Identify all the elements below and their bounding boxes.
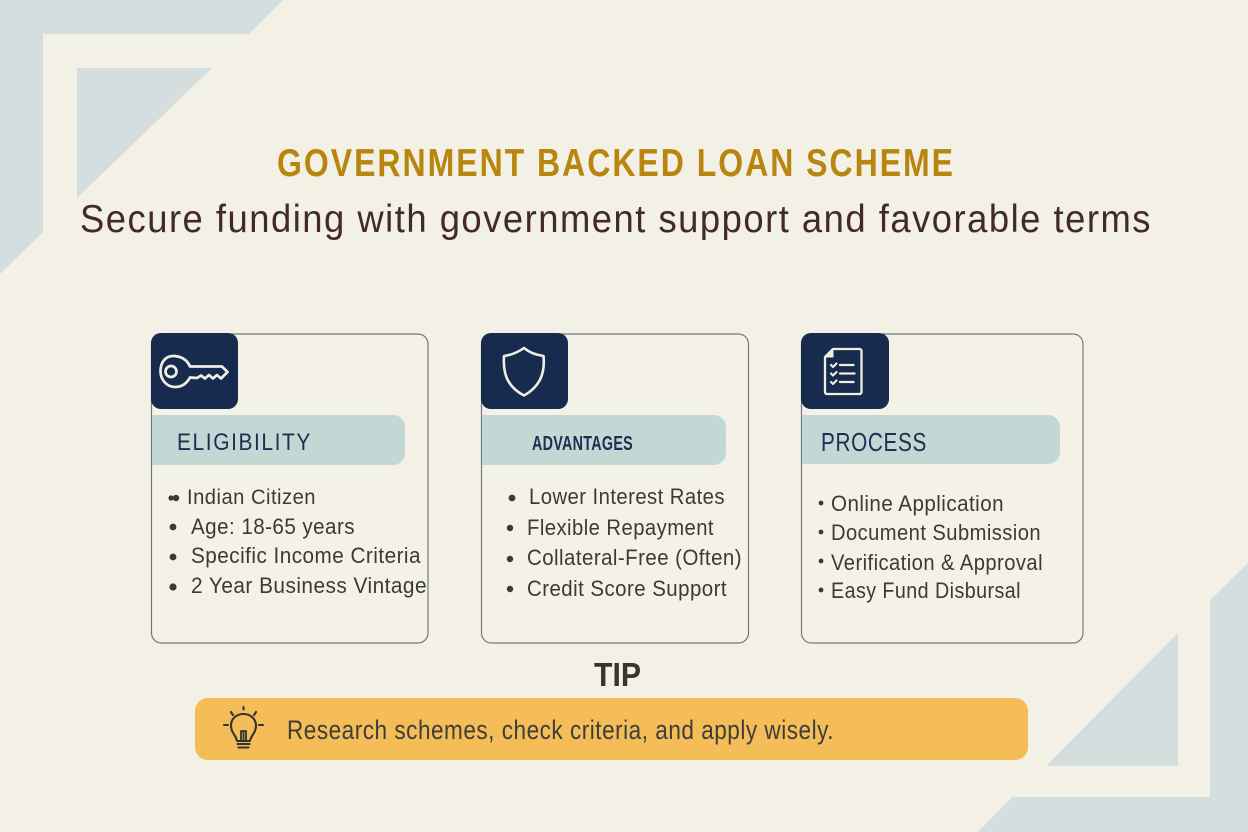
list: process items: Online Application <box>831 491 1004 516</box>
icon: light bulb <box>224 707 263 748</box>
card outline <box>152 334 428 643</box>
heading: tip: TIP <box>594 656 641 693</box>
list: advantages items: Flexible Repayment <box>527 515 714 540</box>
list: process items: Verification & Approval <box>831 550 1043 575</box>
list: advantages items: Collateral-Free (Often) <box>527 545 742 570</box>
heading: advantages: ADVANTAGES <box>532 433 633 455</box>
list: process items: Easy Fund Disbursal <box>831 578 1021 603</box>
list: advantages items: Lower Interest Rates <box>529 484 725 509</box>
list: advantages items: Credit Score Support <box>527 576 727 601</box>
list: process items <box>819 491 1043 603</box>
icon: checklist document <box>801 333 889 409</box>
tip text: Research schemes, check criteria, and apply wisely. <box>287 715 834 745</box>
list: eligibility items: Indian Citizen <box>187 485 316 509</box>
panel: process <box>801 333 1083 643</box>
heading: process: PROCESS <box>821 427 927 457</box>
list: eligibility items: Age: 18-65 years <box>191 514 355 539</box>
panel: eligibility <box>151 333 428 643</box>
list: process items: Document Submission <box>831 520 1041 545</box>
heading band <box>482 415 726 465</box>
icon: key <box>151 333 238 409</box>
list: eligibility items: Specific Income Criteria <box>191 543 421 568</box>
panel: advantages <box>481 333 748 643</box>
icon: shield <box>481 333 568 409</box>
list: eligibility items: 2 Year Business Vintage <box>191 573 427 598</box>
card outline <box>802 334 1083 643</box>
list: advantages items <box>507 484 742 601</box>
heading band <box>152 415 405 465</box>
decoration: bottom-right corner shapes <box>978 563 1248 832</box>
decoration: top-left corner shapes <box>0 0 283 274</box>
heading band <box>802 415 1060 464</box>
list: eligibility items <box>168 485 427 598</box>
title: GOVERNMENT BACKED LOAN SCHEME <box>277 142 955 185</box>
card outline <box>482 334 748 643</box>
heading: eligibility: ELIGIBILITY <box>177 429 312 456</box>
callout: tip bar <box>195 698 1028 760</box>
subtitle: Secure funding with government support and favorable terms <box>80 198 1152 241</box>
